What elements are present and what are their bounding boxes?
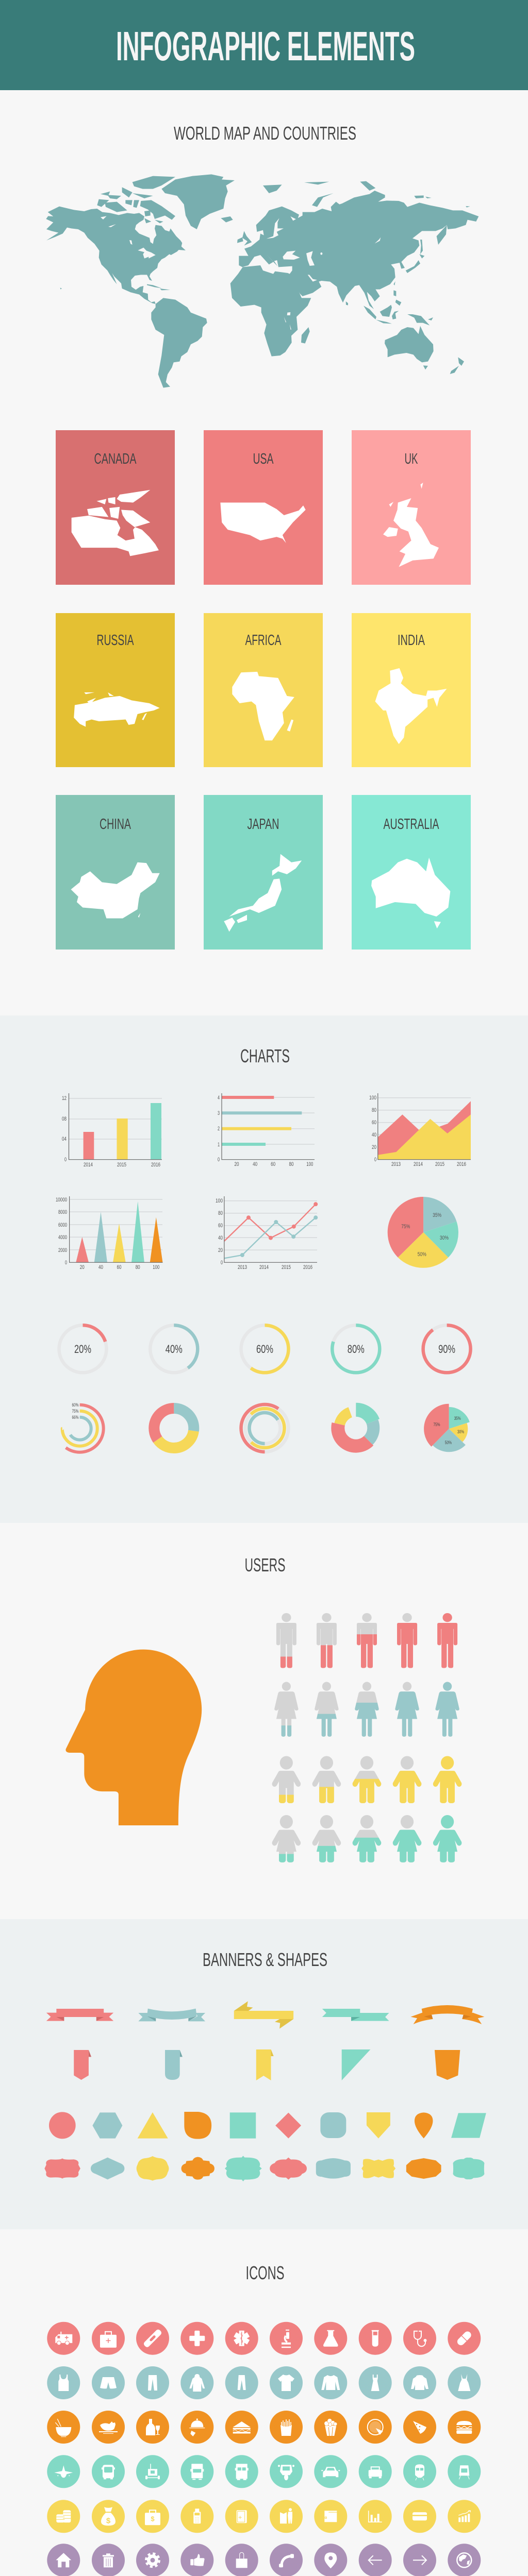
icon: sandwich	[225, 2411, 258, 2444]
map: Americas and Greenland	[46, 174, 235, 388]
icon: jacket	[403, 2366, 436, 2399]
map: Eurasia, Africa and Oceania	[230, 181, 478, 374]
progress ring 20%	[59, 1325, 106, 1372]
pie chart	[388, 1197, 458, 1268]
banner: green ribbon	[322, 2009, 389, 2021]
panel: USA	[204, 430, 323, 585]
area chart: 100	[369, 1095, 376, 1101]
icon: payment terminal	[180, 2500, 213, 2533]
pie chart: 50%	[418, 1251, 426, 1258]
shape: yellow triangle	[138, 2112, 168, 2139]
icon: shopping bag	[225, 2544, 258, 2576]
pictogram row: men	[276, 1613, 457, 1668]
pie chart: 30%	[440, 1235, 449, 1241]
line chart: 60	[218, 1223, 223, 1229]
area chart: 0	[374, 1157, 376, 1163]
icon: hooded coat	[180, 2366, 213, 2399]
exploded pie chart	[424, 1404, 470, 1452]
badge: teal cushion	[316, 2158, 351, 2179]
pictogram row: girls	[272, 1815, 461, 1862]
icon: growth chart	[448, 2500, 481, 2533]
banner: teal ribbon	[138, 2009, 205, 2021]
icon: pizza slice	[403, 2411, 436, 2444]
heading: icons: ICONS	[245, 2262, 285, 2283]
triangle bar chart: 6000	[58, 1222, 67, 1228]
triangle bar chart: 2000	[58, 1247, 67, 1253]
icon: money bag	[92, 2500, 125, 2533]
horizontal bar chart: 60	[271, 1161, 275, 1167]
bar chart: 04	[62, 1136, 67, 1142]
bookmark: red	[74, 2050, 91, 2080]
radial bar chart: 66%	[72, 1415, 78, 1420]
panel: India	[352, 613, 471, 767]
heading: banners and shapes: BANNERS & SHAPES	[203, 1949, 327, 1970]
icon: leggings	[225, 2366, 258, 2399]
icon: medical cross	[180, 2322, 213, 2355]
radial bar chart: 75%	[72, 1409, 78, 1414]
banner: yellow ribbon	[234, 2001, 293, 2029]
icon: sweater	[314, 2366, 347, 2399]
horizontal bar chart: 4	[218, 1095, 220, 1101]
icon: wallet	[314, 2500, 347, 2533]
bar chart	[62, 1093, 162, 1168]
panel: Canada	[56, 430, 175, 585]
panel: China	[56, 795, 175, 950]
area chart: 2015	[435, 1161, 444, 1167]
icon: shorts	[92, 2366, 125, 2399]
icon: bandage	[136, 2322, 169, 2355]
horizontal bar chart: 0	[218, 1157, 220, 1163]
triangle bar chart	[56, 1196, 163, 1270]
icon: globe	[448, 2544, 481, 2576]
horizontal bar chart: 100	[306, 1161, 313, 1167]
line chart: 0	[221, 1260, 223, 1266]
badge: teal	[91, 2158, 124, 2179]
icon: airplane	[47, 2455, 80, 2488]
panel: UK	[352, 430, 471, 585]
icon: french fries	[270, 2411, 303, 2444]
exploded pie chart: 50%	[445, 1440, 452, 1445]
icon: noodle bowl	[47, 2411, 80, 2444]
shape: orange drop	[415, 2112, 433, 2139]
heading: users: USERS	[244, 1554, 286, 1575]
panel: UK: UK	[404, 451, 418, 467]
pictogram row: boys	[272, 1756, 461, 1803]
pie chart: 75%	[401, 1224, 410, 1230]
icon: stethoscope	[403, 2322, 436, 2355]
area chart: 40	[372, 1132, 376, 1138]
shape: green rectangle	[230, 2112, 256, 2139]
area chart: 80	[372, 1107, 376, 1113]
icon: pill	[448, 2322, 481, 2355]
icon: gear	[136, 2544, 169, 2576]
icon: wine bottle and glass	[136, 2411, 169, 2444]
exploded pie chart: 30%	[457, 1429, 464, 1434]
area chart: 2016	[457, 1161, 466, 1167]
shape: yellow pennant	[367, 2112, 390, 2139]
progress ring 20%: 20%	[74, 1343, 91, 1355]
world map	[46, 174, 478, 388]
bar chart: 08	[62, 1116, 67, 1122]
panel: Africa	[204, 613, 323, 767]
progress ring 80%: 80%	[348, 1343, 365, 1355]
icon: car	[314, 2455, 347, 2488]
triangle bar chart: 60	[117, 1264, 122, 1270]
icon: truck	[180, 2455, 213, 2488]
icon: trousers	[136, 2366, 169, 2399]
icon: camisole	[448, 2366, 481, 2399]
horizontal bar chart: 2	[218, 1126, 220, 1132]
pie chart: 35%	[433, 1212, 441, 1218]
icon: thumbs up	[180, 2544, 213, 2576]
heading: charts: CHARTS	[240, 1045, 290, 1066]
banner: orange arch ribbon	[410, 2005, 484, 2024]
icon: popcorn	[314, 2411, 347, 2444]
icon: bar chart	[359, 2500, 392, 2533]
icon: whole pizza	[359, 2411, 392, 2444]
icon: ambulance	[47, 2322, 80, 2355]
panel: Japan: JAPAN	[248, 816, 279, 833]
donut chart	[154, 1409, 194, 1448]
icon: money bag: $	[106, 2516, 111, 2525]
icon: trash can	[92, 2544, 125, 2576]
icon: burger	[448, 2411, 481, 2444]
area chart	[369, 1093, 471, 1167]
badge: red scalloped	[270, 2158, 307, 2180]
triangle bar chart: 4000	[58, 1234, 67, 1241]
icon: right arrow	[403, 2544, 436, 2576]
progress ring 80%	[332, 1325, 380, 1372]
bar chart: 2015	[117, 1162, 126, 1168]
panel: China: CHINA	[100, 816, 131, 833]
icon: money briefcase	[136, 2500, 169, 2533]
heading: world map and countries: WORLD MAP AND COUNTRIES	[174, 123, 356, 144]
area chart: 20	[372, 1144, 376, 1150]
icon: coach	[225, 2455, 258, 2488]
triangle bar chart: 100	[153, 1264, 159, 1270]
banner: red ribbon	[46, 2009, 113, 2021]
triangle bar chart: 40	[98, 1264, 103, 1270]
pictogram row: women	[274, 1682, 459, 1737]
banners and shapes group	[44, 2001, 486, 2181]
icon: microscope	[270, 2322, 303, 2355]
radial bar chart: 60%	[72, 1402, 78, 1408]
line chart: 40	[218, 1235, 223, 1241]
shape: green parallelogram	[451, 2113, 486, 2138]
horizontal bar chart: 3	[218, 1110, 220, 1116]
progress ring 40%: 40%	[166, 1343, 183, 1355]
badge: red	[44, 2158, 80, 2179]
header banner	[0, 0, 528, 90]
line chart: 80	[218, 1210, 223, 1216]
bar chart: 2014	[84, 1162, 93, 1168]
horizontal bar chart: 20	[234, 1161, 239, 1167]
panel: Russia	[56, 613, 175, 767]
panel: Japan	[204, 795, 323, 950]
icon: money briefcase: $	[151, 2515, 155, 2522]
icon: jeep	[359, 2455, 392, 2488]
triangle bar chart: 0	[65, 1260, 67, 1266]
progress ring 40%	[150, 1325, 197, 1372]
horizontal bar chart: 1	[218, 1142, 220, 1148]
area chart: 60	[372, 1120, 376, 1126]
exploded pie chart: 75%	[433, 1422, 440, 1427]
icon: serving cloche	[180, 2411, 213, 2444]
triangle bar chart: 10000	[56, 1197, 67, 1203]
bar chart: 0	[64, 1157, 67, 1163]
progress ring 90%	[423, 1325, 471, 1372]
pictogram rows: people	[272, 1613, 461, 1862]
icon: left arrow	[359, 2544, 392, 2576]
icon: ride-on vehicle	[136, 2455, 169, 2488]
icon: medical briefcase	[92, 2322, 125, 2355]
bookmark: green triangle	[342, 2049, 370, 2080]
progress ring 60%: 60%	[256, 1343, 273, 1355]
triangle bar chart: 8000	[58, 1209, 67, 1215]
shape: teal hexagon	[92, 2112, 122, 2139]
icon: head silhouette	[65, 1650, 202, 1825]
badge: green	[225, 2156, 262, 2181]
area chart: 2014	[414, 1161, 423, 1167]
concentric progress chart	[237, 1400, 292, 1456]
line chart: 2016	[303, 1264, 312, 1270]
variable radius donut chart	[338, 1410, 374, 1446]
progress ring 60%	[241, 1325, 289, 1372]
bar chart: 2016	[151, 1162, 160, 1168]
line chart: 20	[218, 1247, 223, 1253]
icon: roast chicken	[92, 2411, 125, 2444]
badge: orange octagon	[406, 2158, 441, 2179]
progress ring 90%: 90%	[438, 1343, 455, 1355]
panel: Russia: RUSSIA	[97, 632, 134, 649]
horizontal bar chart	[218, 1093, 315, 1167]
icon: test tube	[359, 2322, 392, 2355]
panel: USA: USA	[253, 451, 274, 467]
icon: metro	[448, 2455, 481, 2488]
icon: person with map	[270, 2500, 303, 2533]
icon: location pin	[314, 2544, 347, 2576]
bookmark: teal	[165, 2050, 183, 2080]
radial bar chart	[56, 1402, 104, 1452]
icon: safe	[225, 2500, 258, 2533]
panel: Australia	[352, 795, 471, 950]
icon: credit card	[403, 2500, 436, 2533]
icon: phone	[270, 2544, 303, 2576]
icon: flask	[314, 2322, 347, 2355]
line chart: 100	[216, 1198, 223, 1204]
icon: home	[47, 2544, 80, 2576]
icon: bus	[92, 2455, 125, 2488]
panel: Canada: CANADA	[94, 451, 137, 467]
panel: Australia: AUSTRALIA	[384, 816, 439, 833]
badge: orange	[182, 2157, 214, 2180]
icon: coin stacks	[47, 2500, 80, 2533]
shape: orange rounded square	[184, 2112, 211, 2139]
line chart: 2013	[238, 1264, 247, 1270]
badge: green notched	[453, 2158, 484, 2179]
icon: auto rickshaw	[270, 2455, 303, 2488]
icon: star of life	[225, 2322, 258, 2355]
shape: red ellipse	[49, 2112, 76, 2139]
horizontal bar chart: 80	[289, 1161, 294, 1167]
panel: India: INDIA	[398, 632, 425, 649]
bookmark: yellow	[256, 2049, 274, 2080]
panel: Africa: AFRICA	[245, 632, 282, 649]
triangle bar chart: 20	[80, 1264, 85, 1270]
bookmark: orange	[435, 2050, 460, 2080]
badge: yellow bracket	[361, 2159, 395, 2178]
icon: tank top	[47, 2366, 80, 2399]
bar chart: 12	[62, 1095, 67, 1101]
line chart: 2014	[259, 1264, 269, 1270]
exploded pie chart: 35%	[454, 1416, 461, 1421]
shape: teal rounded rectangle	[320, 2112, 346, 2138]
icon: t-shirt	[270, 2366, 303, 2399]
icon: train	[403, 2455, 436, 2488]
icon: dress	[359, 2366, 392, 2399]
triangle bar chart: 80	[136, 1264, 140, 1270]
horizontal bar chart: 40	[253, 1161, 257, 1167]
line chart	[216, 1196, 318, 1270]
line chart: 2015	[282, 1264, 291, 1270]
badge: yellow	[137, 2156, 169, 2181]
shape: red diamond	[275, 2113, 301, 2139]
area chart: 2013	[391, 1161, 401, 1167]
